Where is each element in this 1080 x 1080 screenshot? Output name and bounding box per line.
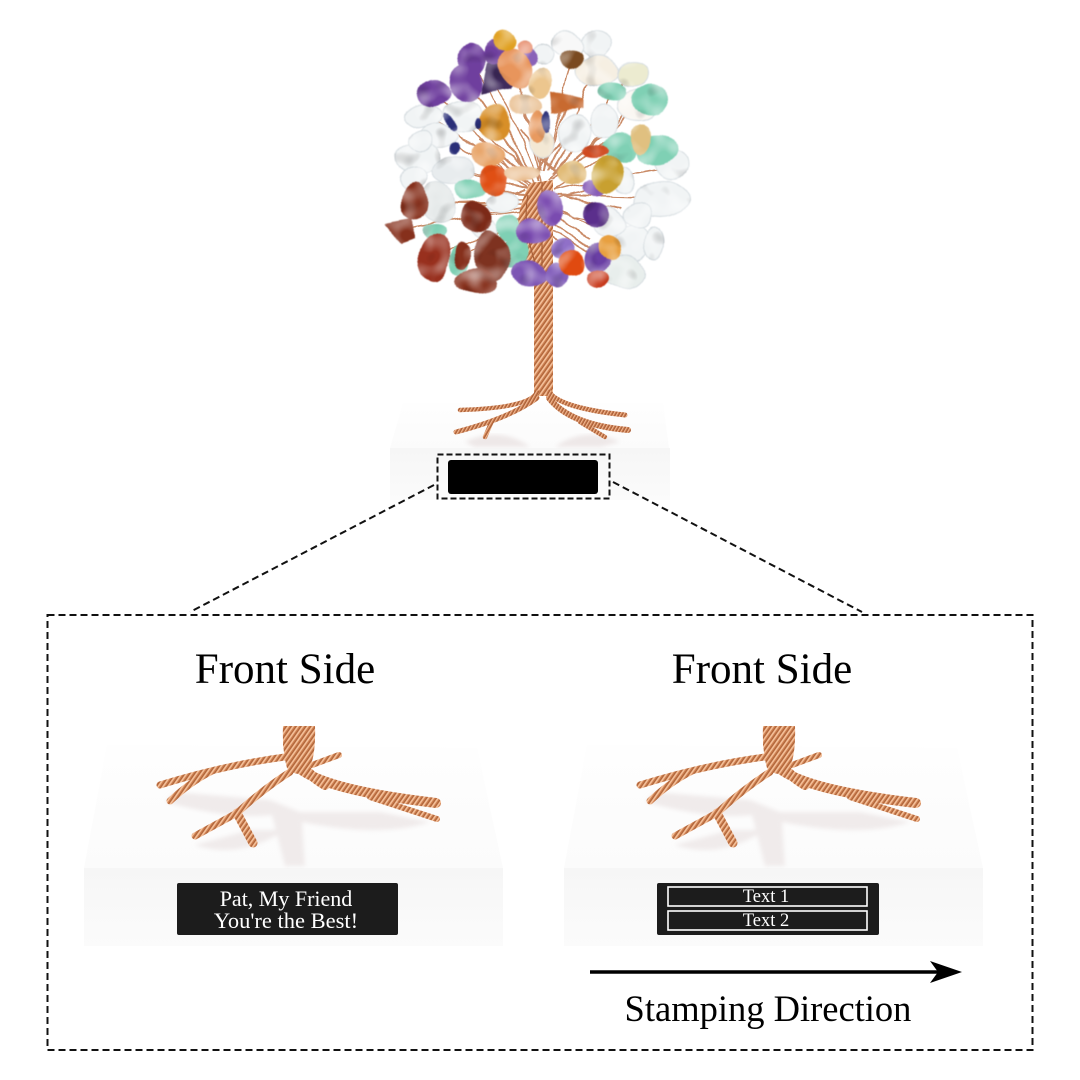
tree: gemstone canopy and copper trunk bbox=[385, 30, 690, 500]
heading: left Front Side: Front Side bbox=[195, 646, 375, 693]
dashed zoom line left bbox=[190, 485, 434, 612]
copper roots on top base bbox=[456, 392, 628, 437]
right base template bbox=[564, 726, 983, 946]
heading: right Front Side: Front Side bbox=[672, 646, 852, 693]
left base example bbox=[84, 726, 503, 946]
carnelian and citrine stones bbox=[470, 32, 652, 276]
dashed zoom line right bbox=[613, 482, 862, 612]
amethyst stones bbox=[418, 38, 612, 287]
copper trunk bbox=[518, 180, 553, 396]
plaque template with text fields: Text 2 bbox=[743, 911, 789, 931]
clear quartz stones bbox=[396, 30, 690, 289]
plaque template with text fields bbox=[657, 883, 879, 935]
top marble base bbox=[390, 403, 670, 500]
engraved plaque example: You're the Best! bbox=[214, 908, 358, 933]
green aventurine stones bbox=[423, 82, 677, 274]
plaque template with text fields: Text 1 bbox=[743, 887, 789, 907]
stamping direction label: Stamping Direction bbox=[625, 988, 911, 1029]
dashed highlight around plaque bbox=[438, 454, 610, 498]
dashed detail panel bbox=[48, 615, 1032, 1050]
black plaque on tree base bbox=[448, 460, 598, 494]
copper wire branches bbox=[400, 58, 673, 282]
lapis stones bbox=[443, 110, 552, 154]
gemstone canopy bbox=[385, 30, 690, 296]
red jasper stones bbox=[385, 183, 609, 296]
stamping direction arrow bbox=[590, 961, 962, 983]
engraved plaque example: Pat, My Friend bbox=[220, 886, 352, 911]
engraved plaque example bbox=[177, 883, 398, 935]
